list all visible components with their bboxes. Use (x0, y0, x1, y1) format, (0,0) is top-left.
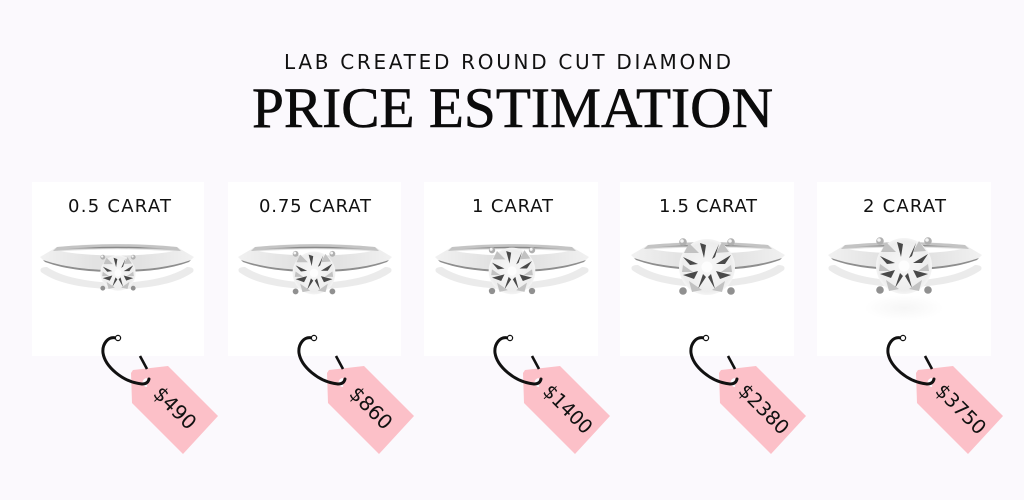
ring: 0.5 carat (40, 244, 194, 291)
ring: 1.5 carat (631, 238, 785, 295)
ring: 1 carat (435, 244, 589, 294)
price tag: $1400 (495, 335, 610, 454)
panel: 0.5 carat (32, 182, 218, 454)
price tag: $2380: $2380 (734, 379, 794, 439)
price tag: $490 (103, 335, 218, 454)
ring: 0.75 carat (238, 244, 392, 294)
price tag: $3750: $3750 (931, 379, 991, 439)
ring: 2 carat (828, 237, 982, 321)
subtitle: LAB CREATED ROUND CUT DIAMOND (284, 50, 731, 74)
title: PRICE ESTIMATION (252, 77, 773, 140)
label: 0.5 carat: 0.5 CARAT (68, 196, 172, 217)
label: 1.5 carat: 1.5 CARAT (659, 196, 758, 217)
price tag: $860: $860 (345, 381, 398, 434)
panel: 0.75 carat (228, 182, 414, 454)
panel: 1.5 carat (620, 182, 806, 454)
price tag: $490: $490 (149, 381, 202, 434)
price tag: $860 (299, 335, 414, 454)
label: 0.75 carat: 0.75 CARAT (259, 196, 372, 217)
label: 2 carat: 2 CARAT (863, 196, 947, 217)
label: 1 carat: 1 CARAT (472, 196, 554, 217)
panel: 2 carat (817, 182, 1003, 454)
panel: 1 carat (424, 182, 610, 454)
price tag: $2380 (691, 335, 806, 454)
price tag: $1400: $1400 (538, 380, 597, 439)
price tag: $3750 (888, 335, 1003, 454)
